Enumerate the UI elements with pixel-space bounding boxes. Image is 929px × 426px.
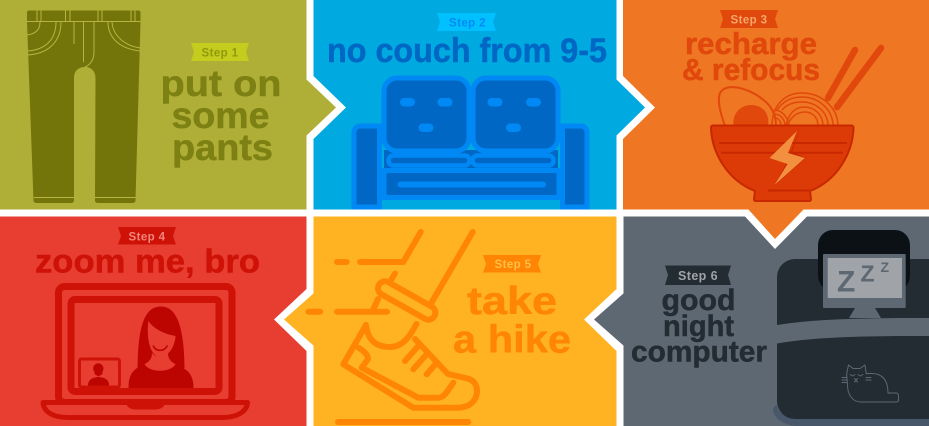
heading: zoom me, bro: zoom me, bro (35, 242, 260, 280)
step label 1 (191, 43, 249, 61)
panel: step 3 (623, 0, 929, 210)
icon: laptop video call (43, 286, 248, 418)
heading: put on some pants: some (172, 95, 270, 136)
heading: put on some pants (160, 63, 282, 168)
heading: good night computer: good (662, 284, 736, 317)
heading: no couch from 9-5: no couch from 9-5 (327, 32, 607, 70)
step label 4: Step 4 (129, 232, 166, 244)
panel: step 5 (308, 216, 616, 426)
heading: take a hike (453, 280, 571, 362)
heading: good night computer: computer (631, 336, 767, 368)
arrow: step 6 to 5 (584, 289, 624, 351)
heading: recharge & refocus: & refocus (682, 52, 820, 87)
heading: recharge & refocus: recharge (685, 26, 817, 61)
step label 4 (118, 227, 176, 244)
icon: bed with sleeping computer (773, 230, 929, 426)
snoring z letters: Z (880, 259, 890, 275)
step label 3 (720, 10, 778, 28)
heading: take a hike: take (467, 280, 557, 323)
snoring z letters: Z (837, 266, 855, 298)
arrow: step 2 to 3 (616, 76, 655, 139)
step label 6: Step 6 (678, 269, 718, 283)
icon: couch (354, 78, 587, 207)
inset video of man (80, 359, 120, 387)
arrow: step 3 to 6 (745, 209, 807, 249)
panel: step 4 (0, 216, 306, 426)
step label 2: Step 2 (449, 18, 486, 30)
icon: pants (27, 10, 140, 203)
step label 6 (665, 266, 731, 285)
icon: ramen bowl (711, 48, 881, 201)
heading: put on some pants: put on (160, 63, 282, 104)
heading: take a hike: a hike (453, 318, 571, 362)
snoring z letters: Z (860, 260, 875, 286)
heading: recharge & refocus (682, 26, 820, 87)
step label 3: Step 3 (731, 14, 767, 26)
heading: good night computer: night (663, 310, 734, 343)
panel: step 6 (624, 216, 929, 426)
panel: step 1 (0, 0, 306, 210)
step label 5 (483, 255, 541, 272)
arrow: step 5 to 4 (274, 289, 320, 351)
arrow: step 1 to 2 (306, 76, 346, 139)
icon: sleeping cat (842, 365, 898, 402)
panel: step 2 (314, 0, 616, 210)
heading: good night computer (631, 284, 767, 368)
icon: walking shoe (308, 232, 477, 422)
step label 5: Step 5 (495, 259, 532, 271)
step label 1: Step 1 (202, 48, 239, 60)
woman on screen (128, 306, 194, 388)
monitor screen (828, 258, 902, 298)
step label 2 (437, 13, 496, 31)
icon: lightning bolt (770, 131, 805, 185)
heading: put on some pants: pants (172, 127, 273, 168)
snoring z letters (837, 259, 890, 298)
